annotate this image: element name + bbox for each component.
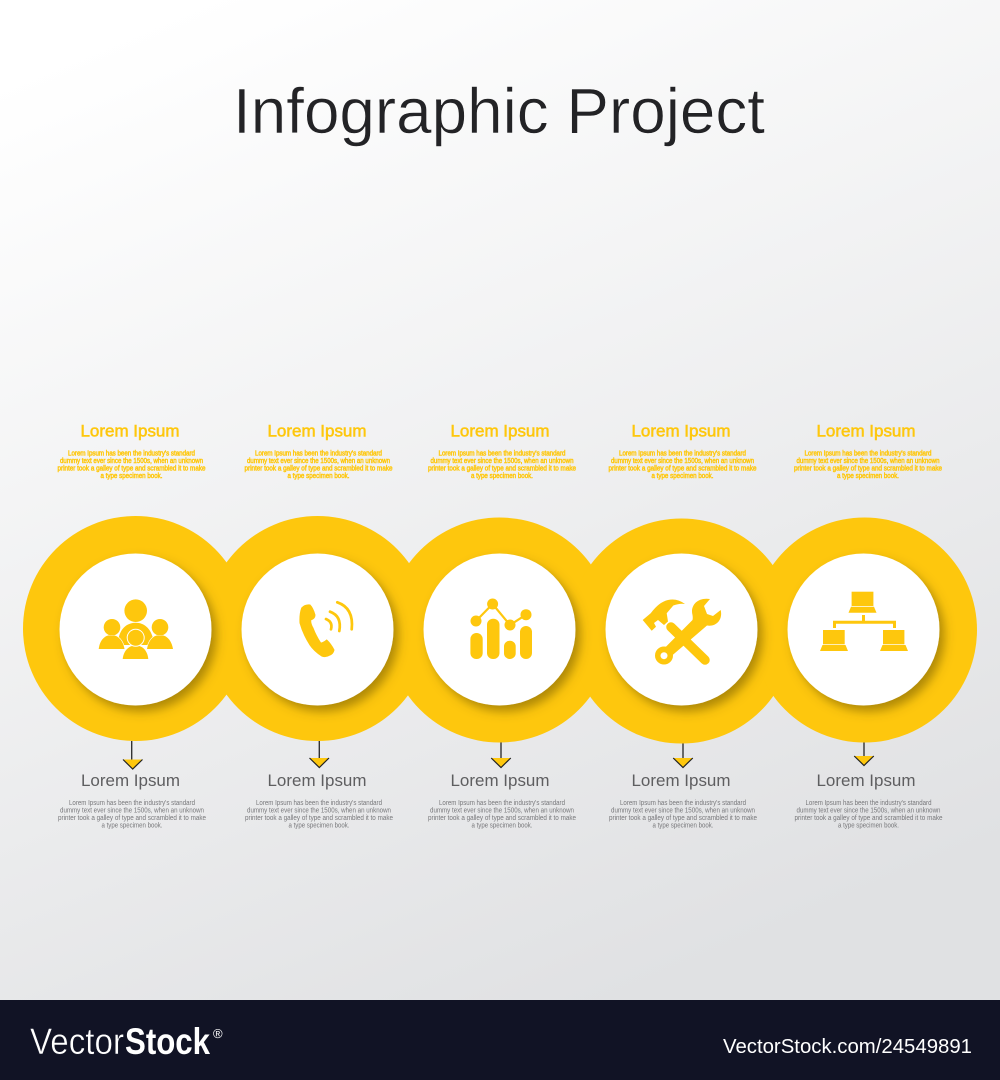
upper text 4: a type specimen book. — [652, 471, 714, 480]
arrow 5 — [854, 742, 874, 766]
lower text 5: Lorem Ipsum has been the industry's standard — [806, 800, 932, 807]
lower text 4: a type specimen book. — [652, 822, 714, 830]
lower text 3: a type specimen book. — [472, 822, 533, 830]
lower text 2: printer took a galley of type and scrambled it to make — [245, 815, 393, 822]
lower text 1: dummy text ever since the 1500s, when an unknown — [60, 808, 204, 814]
upper text 1: a type specimen book. — [100, 471, 162, 480]
icon: chart — [470, 598, 532, 659]
upper text 3: dummy text ever since the 1500s, when an unknown — [430, 456, 574, 465]
arrows — [123, 741, 874, 769]
lower text 4: Lorem Ipsum — [632, 771, 730, 790]
lower text 4: dummy text ever since the 1500s, when an unknown — [611, 808, 755, 814]
upper text blocks — [58, 422, 942, 480]
lower text 4: printer took a galley of type and scrambled it to make — [609, 815, 757, 822]
footer logo: Vector — [30, 1021, 124, 1062]
lower text 2: Lorem Ipsum — [268, 771, 366, 790]
arrow 1 — [123, 741, 142, 769]
upper text 4: dummy text ever since the 1500s, when an unknown — [611, 456, 754, 465]
upper text 5: dummy text ever since the 1500s, when an unknown — [796, 456, 940, 465]
upper text 2: printer took a galley of type and scrambled it to make — [244, 464, 392, 472]
lower text 5: dummy text ever since the 1500s, when an unknown — [796, 808, 941, 814]
icon: people — [99, 599, 173, 659]
upper text 5: Lorem Ipsum has been the industry's standard — [804, 448, 932, 458]
upper text 2: Lorem Ipsum — [268, 422, 366, 440]
upper text 1: printer took a galley of type and scrambled it to make — [58, 464, 206, 472]
lower text 2 — [245, 771, 393, 830]
upper text 5: printer took a galley of type and scrambled it to make — [794, 464, 942, 472]
lower text blocks — [58, 771, 943, 830]
upper text 2: a type specimen book. — [288, 471, 350, 480]
footer logo — [30, 1021, 223, 1062]
upper text 4 — [608, 422, 756, 480]
lower text 5: Lorem Ipsum — [816, 771, 916, 790]
upper text 1: Lorem Ipsum — [80, 422, 180, 440]
footer id: VectorStock.com/24549891 — [723, 1036, 972, 1058]
upper text 3: Lorem Ipsum — [450, 422, 550, 440]
upper text 4: printer took a galley of type and scrambled it to make — [608, 464, 756, 472]
upper text 2: Lorem Ipsum has been the industry's standard — [255, 448, 382, 458]
icon: tools — [643, 599, 721, 664]
lower text 3: Lorem Ipsum has been the industry's standard — [439, 800, 565, 807]
footer logo: ® — [213, 1026, 223, 1041]
upper text 3: a type specimen book. — [471, 471, 533, 480]
upper text 4: Lorem Ipsum — [632, 422, 730, 440]
lower text 5: a type specimen book. — [838, 822, 899, 830]
upper text 2 — [244, 422, 392, 480]
upper text 3: Lorem Ipsum has been the industry's standard — [438, 448, 566, 458]
lower text 5 — [794, 771, 943, 830]
footer logo: Stock — [125, 1021, 210, 1062]
upper text 5: a type specimen book. — [837, 471, 899, 480]
arrow 2 — [310, 741, 329, 768]
title: Infographic Project — [233, 75, 765, 147]
upper text 1: Lorem Ipsum has been the industry's standard — [68, 448, 195, 458]
lower text 1 — [58, 771, 206, 830]
upper text 5: Lorem Ipsum — [816, 422, 916, 440]
upper text 2: dummy text ever since the 1500s, when an unknown — [247, 456, 390, 465]
upper text 1 — [58, 422, 206, 480]
upper text 5 — [794, 422, 942, 480]
lower text 5: printer took a galley of type and scrambled it to make — [794, 815, 943, 822]
lower text 1: Lorem Ipsum has been the industry's standard — [69, 800, 195, 807]
lower text 3: dummy text ever since the 1500s, when an unknown — [430, 808, 574, 814]
lower text 2: dummy text ever since the 1500s, when an unknown — [247, 808, 391, 814]
arrow 3 — [491, 742, 511, 768]
icon: phone — [300, 602, 352, 657]
upper text 1: dummy text ever since the 1500s, when an unknown — [60, 456, 203, 465]
lower text 1: printer took a galley of type and scrambled it to make — [58, 815, 206, 822]
lower text 2: Lorem Ipsum has been the industry's standard — [256, 800, 382, 807]
lower text 4: Lorem Ipsum has been the industry's standard — [620, 800, 746, 807]
lower text 4 — [609, 771, 757, 830]
lower text 3: printer took a galley of type and scrambled it to make — [428, 815, 576, 822]
icon: network — [820, 592, 908, 651]
white inner discs — [60, 554, 940, 706]
arrow 4 — [673, 743, 693, 768]
upper text 3 — [428, 422, 576, 480]
lower text 2: a type specimen book. — [288, 822, 350, 830]
lower text 3: Lorem Ipsum — [450, 771, 550, 790]
upper text 3: printer took a galley of type and scrambled it to make — [428, 464, 576, 472]
lower text 3 — [428, 771, 576, 830]
lower text 1: a type specimen book. — [102, 822, 163, 830]
yellow chain of circles — [23, 516, 977, 744]
footer bar — [0, 1000, 1000, 1080]
upper text 4: Lorem Ipsum has been the industry's standard — [619, 448, 746, 458]
lower text 1: Lorem Ipsum — [81, 771, 180, 790]
